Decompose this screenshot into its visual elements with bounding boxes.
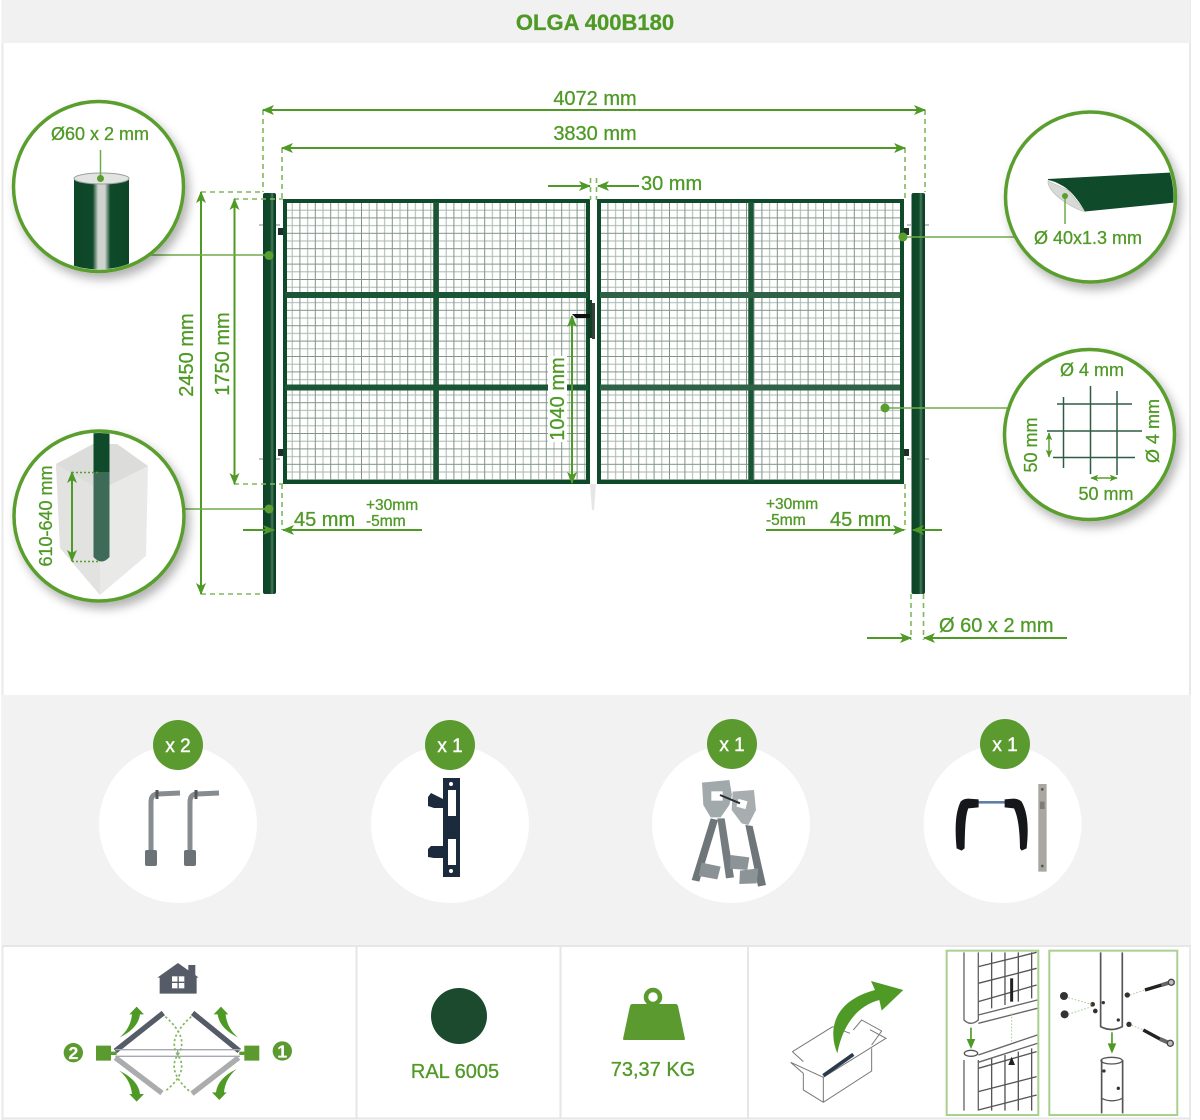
swing direction diagram: 1	[277, 1041, 287, 1061]
callout: mesh: 50 mm	[1021, 417, 1041, 473]
dimension: left clearance 45 mm: +30mm	[366, 497, 418, 514]
swing arcs	[165, 1017, 191, 1092]
posts	[96, 1046, 117, 1061]
left post	[259, 193, 283, 594]
dimension: post height 2450 mm: 2450 mm	[176, 313, 198, 397]
bolt right	[184, 790, 219, 866]
accessory: hinge bolts x 2	[99, 720, 257, 903]
mesh detail	[1047, 386, 1142, 475]
weight	[611, 990, 695, 1081]
weight: 73,37 KG	[611, 1059, 695, 1081]
dimension: right clearance 45 mm: +30mm	[766, 496, 818, 513]
dimension: right clearance 45 mm: 45 mm	[830, 509, 891, 531]
callout: post section: Ø60 x 2 mm	[51, 124, 149, 144]
accessory: keys x 1: x 1	[719, 735, 745, 756]
accessory: keys x 1	[652, 719, 810, 903]
callout: frame tube: Ø 40x1.3 mm	[1034, 228, 1142, 248]
dimension: gap 30 mm	[548, 173, 702, 200]
lock and handle	[572, 300, 596, 510]
dimension: post diameter: Ø 60 x 2 mm	[939, 615, 1053, 637]
callout: concrete foundation: 610-640 mm	[36, 465, 56, 567]
colour swatch: RAL 6005	[411, 1061, 499, 1083]
left leaf	[285, 201, 588, 482]
callout: post section	[14, 102, 274, 278]
title: OLGA 400B180	[516, 10, 674, 35]
dimension: left clearance 45 mm: -5mm	[366, 513, 406, 530]
title bar	[2, 0, 1190, 43]
box	[791, 1020, 886, 1102]
callout: frame tube	[898, 112, 1180, 282]
accessory: strike plate x 1: x 1	[437, 736, 463, 757]
swing direction diagram	[64, 963, 292, 1102]
dimension: handle height 1040 mm: 1040 mm	[547, 357, 569, 441]
dimension: gate width 3830 mm: 3830 mm	[553, 123, 637, 145]
dimension: total width 4072 mm: 4072 mm	[553, 88, 637, 110]
accessories band	[2, 695, 1191, 946]
unboxing icon	[791, 981, 903, 1102]
assembly step 2	[1049, 951, 1177, 1115]
callout: mesh	[880, 350, 1174, 520]
dimension: gate height 1750 mm: 1750 mm	[212, 312, 234, 396]
tube	[1048, 172, 1180, 212]
dimension: left clearance 45 mm	[243, 484, 422, 531]
dimension: handle height 1040 mm	[547, 316, 572, 483]
bolt left	[145, 790, 180, 866]
dimension: gate height 1750 mm	[212, 199, 283, 484]
arrow	[833, 981, 903, 1053]
callout: mesh: Ø 4 mm	[1143, 399, 1163, 463]
swing direction diagram: 2	[68, 1043, 78, 1063]
right leaf	[598, 201, 902, 482]
dimension: post diameter	[867, 594, 1067, 640]
dimension: gate width 3830 mm	[282, 123, 905, 200]
dimension: gap 30 mm: 30 mm	[641, 173, 702, 195]
concrete block with post	[56, 430, 148, 595]
icon: house	[157, 963, 199, 994]
bottom row dividers	[2, 946, 1191, 1119]
callout: mesh: Ø 4 mm	[1060, 360, 1124, 380]
accessory: handle set x 1	[924, 719, 1082, 903]
accessory: hinge bolts x 2: x 2	[165, 736, 191, 757]
dimension: left clearance 45 mm: 45 mm	[294, 509, 355, 531]
badge 1	[273, 1041, 292, 1061]
dimension: total width 4072 mm	[263, 88, 925, 192]
callout: concrete foundation	[14, 430, 274, 601]
accessory: handle set x 1: x 1	[992, 735, 1018, 756]
badge 2	[64, 1043, 83, 1062]
dimension: post height 2450 mm	[176, 192, 263, 594]
right post	[904, 193, 929, 594]
gate drawing	[259, 193, 929, 594]
assembly step 1	[947, 951, 1038, 1115]
colour swatch	[411, 988, 499, 1083]
pipe	[74, 173, 129, 278]
callout: mesh: 50 mm	[1078, 484, 1134, 504]
dimension: right clearance 45 mm	[766, 484, 942, 531]
dimension: right clearance 45 mm: -5mm	[766, 512, 806, 529]
swing arrows	[119, 1007, 238, 1102]
gate leaves	[115, 1013, 163, 1051]
accessory: strike plate x 1	[371, 720, 529, 903]
